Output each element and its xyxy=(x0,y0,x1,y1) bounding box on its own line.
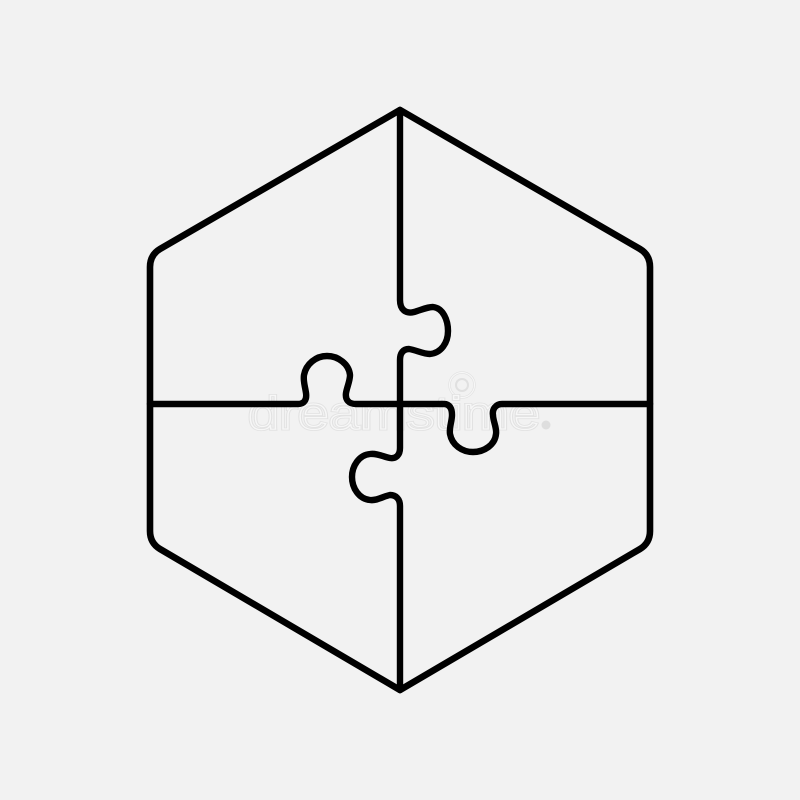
puzzle seam: top vertical with right-facing tab xyxy=(400,110,448,404)
puzzle seam: left horizontal with upward tab xyxy=(150,356,400,404)
hexagon outline xyxy=(150,110,650,690)
watermark: dreamstime: dreamstime xyxy=(248,387,540,439)
watermark: dreamstime: dreamstime xyxy=(248,387,540,439)
puzzle seam: bottom vertical with left-facing tab xyxy=(352,404,400,690)
puzzle seam: right horizontal with downward tab xyxy=(400,404,650,452)
watermark: dreamstime xyxy=(248,372,550,439)
